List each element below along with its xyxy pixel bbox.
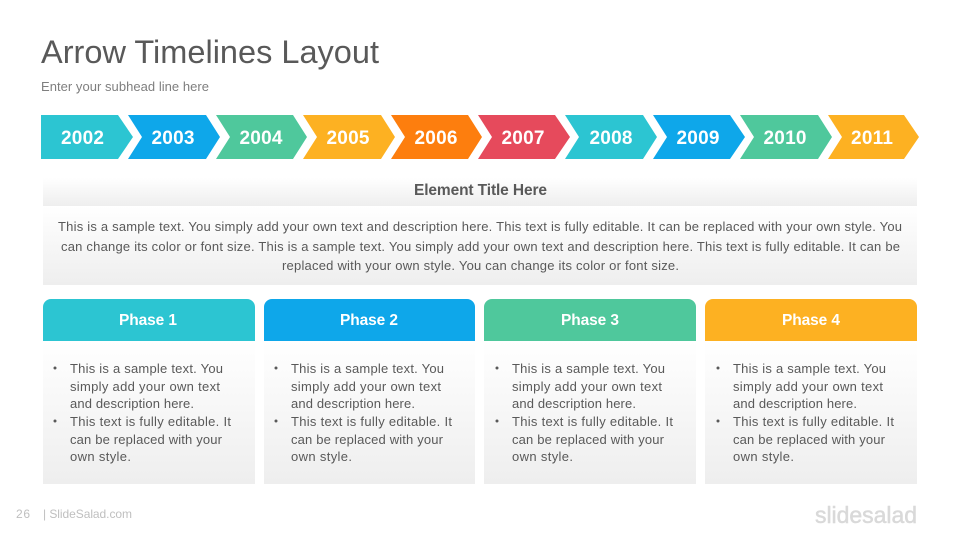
phase 1 bullets: own style. (70, 449, 131, 464)
arrow: 2006: 2006 (414, 128, 458, 149)
footer site name: | SlideSalad.com (43, 507, 132, 521)
phase 1 bullets (54, 361, 231, 464)
arrow: 2002: 2002 (61, 128, 104, 149)
phase 1 bullets: This is a sample text. You (70, 361, 223, 376)
phase 3 bullets: own style. (512, 449, 573, 464)
phase 4 body (705, 341, 917, 484)
title: Arrow Timelines Layout (41, 34, 379, 70)
phase 2 header (264, 299, 475, 341)
panel: element title (43, 178, 917, 206)
arrow: 2010: 2010 (764, 128, 806, 149)
panel: phase 1 (43, 299, 255, 484)
phase 4 bullets: This text is fully editable. It (733, 414, 894, 429)
arrow: 2006 (391, 115, 482, 159)
arrow: 2009 (653, 115, 745, 159)
description text (58, 219, 902, 273)
description text: This is a sample text. You simply add your own text and description here. This text is fully editable. It can be replaced with your own style. You (58, 219, 902, 234)
panel: phase 4 (705, 299, 917, 484)
arrow: 2007: 2007 (502, 128, 544, 149)
phase 3 bullets: simply add your own text (512, 379, 662, 394)
arrow: 2008 (565, 115, 657, 159)
phase 3 header: Phase 3 (561, 312, 619, 329)
phase 3 header (484, 299, 696, 341)
phase 2 bullets: This text is fully editable. It (291, 414, 452, 429)
logo wordmark: slidesalad (815, 502, 917, 528)
arrow: 2004: 2004 (240, 128, 283, 149)
phase 3 bullets (496, 361, 673, 464)
panel: phase 2 (264, 299, 475, 484)
arrow: 2011: 2011 (851, 128, 893, 149)
phase 1 header (43, 299, 255, 341)
arrow: 2002 (41, 115, 133, 159)
phase 4 bullets: own style. (733, 449, 794, 464)
phase 4 bullets: can be replaced with your (733, 432, 886, 447)
description text: replaced with your own style. You can change its color or font size. (282, 258, 679, 273)
description text: can change its color or font size. This is a sample text. You simply add your own text and description here. This text is fully editable. It can be (61, 239, 900, 254)
arrow: 2003: 2003 (152, 128, 194, 149)
phase 4 bullets: and description here. (733, 396, 857, 411)
phase 2 bullets: and description here. (291, 396, 415, 411)
panel: description (43, 206, 917, 285)
phase 1 header: Phase 1 (119, 312, 177, 329)
phase 1 bullets: simply add your own text (70, 379, 220, 394)
arrow: 2003 (128, 115, 220, 159)
arrow: 2007 (478, 115, 570, 159)
arrow timeline (41, 115, 919, 159)
phase 1 body (43, 341, 255, 484)
arrow: 2011 (828, 115, 919, 159)
arrow: 2004 (216, 115, 307, 159)
arrow: 2005: 2005 (326, 128, 370, 149)
phase 3 bullets: and description here. (512, 396, 636, 411)
phase 1 bullets: and description here. (70, 396, 194, 411)
phase 4 bullets: This is a sample text. You (733, 361, 886, 376)
heading: element title: Element Title Here (414, 182, 547, 199)
arrow: 2005 (303, 115, 395, 159)
phase 4 bullets (716, 361, 894, 464)
phase 2 body (264, 341, 475, 484)
phase 2 bullets: simply add your own text (291, 379, 441, 394)
phase 2 bullets: This is a sample text. You (291, 361, 444, 376)
phase 4 header (705, 299, 917, 341)
phase 2 bullets: own style. (291, 449, 352, 464)
phase 3 bullets: This text is fully editable. It (512, 414, 673, 429)
subhead: Enter your subhead line here (41, 79, 209, 94)
phase 2 header: Phase 2 (340, 312, 398, 329)
phase 4 header: Phase 4 (782, 312, 840, 329)
phase 3 bullets: This is a sample text. You (512, 361, 665, 376)
panel: phase 3 (484, 299, 696, 484)
page number: 26 (16, 507, 30, 521)
phase 3 body (484, 341, 696, 484)
phase 3 bullets: can be replaced with your (512, 432, 665, 447)
phase 2 bullets: can be replaced with your (291, 432, 444, 447)
phase 4 bullets: simply add your own text (733, 379, 883, 394)
phase 1 bullets: This text is fully editable. It (70, 414, 231, 429)
arrow: 2010 (740, 115, 832, 159)
arrow: 2008: 2008 (590, 128, 632, 149)
arrow: 2009: 2009 (676, 128, 720, 149)
phase 1 bullets: can be replaced with your (70, 432, 223, 447)
phase 2 bullets (274, 361, 452, 464)
